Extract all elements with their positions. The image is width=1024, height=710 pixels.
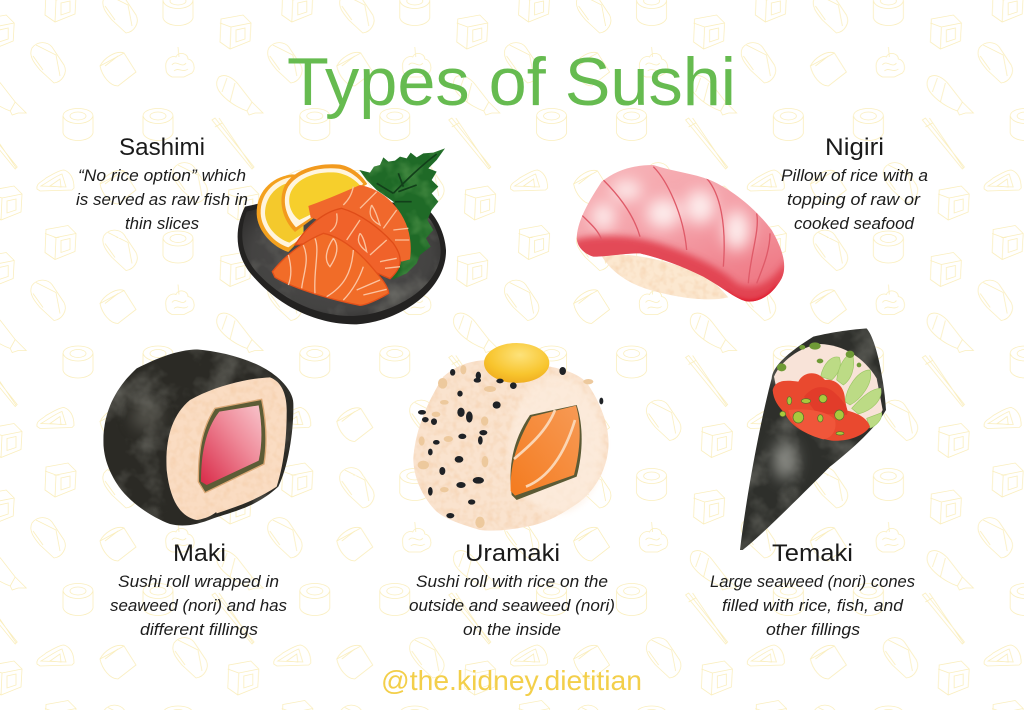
sesame seeds xyxy=(418,367,603,518)
toasted sesame xyxy=(418,365,593,528)
rice xyxy=(602,255,728,299)
plate xyxy=(238,190,446,324)
back lemon slice xyxy=(257,174,303,252)
salmon slice: back xyxy=(308,185,411,262)
heading: Maki: Maki xyxy=(173,540,226,567)
description: Temaki: Large seaweed (nori) cones xyxy=(710,573,915,591)
salmon fat lines xyxy=(514,410,575,487)
illustration: temaki cone xyxy=(737,325,890,555)
tuna chunks xyxy=(773,373,870,441)
illustration: maki roll xyxy=(100,347,300,533)
illustration: nigiri xyxy=(576,165,784,302)
rice garnish xyxy=(777,342,861,371)
tuna topping xyxy=(576,165,784,302)
inner nori xyxy=(511,405,582,500)
description: Nigiri: Pillow of rice with a xyxy=(781,167,928,185)
description: Maki: different fillings xyxy=(140,621,258,639)
description: Temaki: filled with rice, fish, and xyxy=(722,597,904,615)
description: Sashimi: thin slices xyxy=(125,215,199,233)
description: Uramaki: on the inside xyxy=(463,621,561,639)
rice face xyxy=(166,377,287,520)
description: Temaki xyxy=(710,573,915,639)
shiso leaf xyxy=(359,148,445,280)
salmon filling xyxy=(511,406,580,496)
salmon slice: middle xyxy=(295,208,400,279)
description: Nigiri: topping of raw or xyxy=(787,191,922,209)
inner nori xyxy=(198,399,266,493)
description: Maki xyxy=(110,573,287,639)
nori wrap xyxy=(100,347,300,533)
heading: Sashimi: Sashimi xyxy=(119,134,205,161)
rice body xyxy=(413,360,609,531)
description: Temaki: other fillings xyxy=(766,621,860,639)
description: Maki: Sushi roll wrapped in xyxy=(118,573,279,591)
illustration: sashimi plate xyxy=(238,148,446,324)
description: Uramaki xyxy=(409,573,615,639)
heading: Uramaki: Uramaki xyxy=(465,540,560,567)
tamago topping xyxy=(484,343,549,383)
rice face highlight xyxy=(510,377,603,513)
description: Uramaki: outside and seaweed (nori) xyxy=(409,597,615,615)
heading: Temaki: Temaki xyxy=(772,540,853,567)
description: Nigiri: cooked seafood xyxy=(794,215,915,233)
panel: nigiri text xyxy=(781,134,928,233)
scallion garnish xyxy=(780,395,844,435)
description: Sashimi: is served as raw fish in xyxy=(76,191,248,209)
rice filling xyxy=(774,344,883,427)
avocado slices xyxy=(821,355,882,428)
description: Maki: seaweed (nori) and has xyxy=(110,597,287,615)
panel: uramaki text xyxy=(409,540,615,639)
salmon slice: front xyxy=(272,233,389,305)
panel: sashimi text xyxy=(76,134,248,233)
description: Nigiri xyxy=(781,167,928,233)
description: Sashimi xyxy=(76,167,248,233)
illustration: uramaki roll xyxy=(413,343,609,531)
panel: temaki text xyxy=(710,540,915,639)
panel: maki text xyxy=(110,540,287,639)
description: Sashimi: “No rice option” which xyxy=(78,167,246,185)
heading: Nigiri: Nigiri xyxy=(825,134,884,161)
footer handle: @the.kidney.dietitian xyxy=(381,665,642,696)
description: Uramaki: Sushi roll with rice on the xyxy=(416,573,608,591)
tuna filling xyxy=(201,405,261,485)
nori cone xyxy=(737,325,890,555)
title: Types of Sushi xyxy=(287,44,736,120)
front lemon slice xyxy=(281,164,367,232)
